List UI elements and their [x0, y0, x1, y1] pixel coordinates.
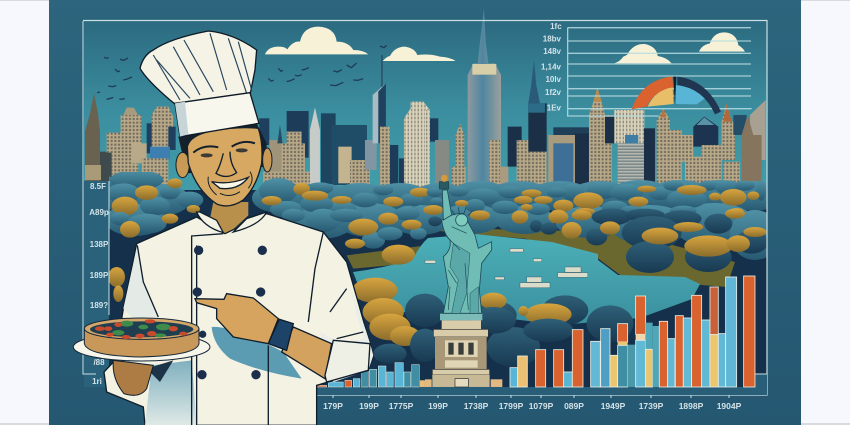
left axis labels: 189? — [90, 301, 108, 310]
clouds — [265, 27, 745, 63]
forearm and pointing hand — [195, 294, 370, 382]
left axis labels: 8.5F — [90, 182, 106, 191]
bar chart — [317, 363, 425, 387]
left hand under plate — [113, 360, 153, 395]
frame border lines — [83, 20, 767, 395]
skyline right — [425, 8, 766, 188]
x axis ticks and labels — [323, 395, 742, 411]
park ground — [109, 190, 767, 387]
x axis ticks and labels: 199P — [428, 401, 448, 411]
chef hat — [140, 31, 259, 137]
x axis ticks and labels: 1898P — [679, 401, 704, 411]
chart: horizontal grid with value labels: 1,14v — [541, 62, 562, 71]
bottom strip under bars — [316, 387, 767, 395]
buttons — [193, 246, 267, 379]
face — [187, 128, 262, 206]
gauge chart — [632, 76, 721, 114]
chef figure — [73, 31, 373, 425]
x axis ticks and labels: 089P — [564, 401, 584, 411]
filler tree canopy — [99, 180, 780, 260]
statue figure — [439, 175, 492, 313]
dish on plate — [73, 318, 210, 361]
sky — [84, 21, 767, 221]
x axis ticks and labels: 1949P — [601, 401, 626, 411]
x axis ticks and labels: 1079P — [529, 401, 554, 411]
icon: Statue of Liberty — [432, 175, 492, 387]
boats on lake — [360, 211, 588, 288]
panel: illustrated scene — [75, 8, 780, 387]
x axis ticks and labels: 1799P — [499, 401, 524, 411]
x axis ticks and labels: 199P — [359, 401, 379, 411]
hair and ears — [176, 123, 272, 178]
birds — [97, 45, 387, 99]
chart: horizontal grid with value labels: 148v — [543, 47, 562, 56]
x axis ticks and labels: 1738P — [464, 401, 489, 411]
lake — [353, 234, 700, 325]
chart: horizontal grid with value labels: 18bv — [543, 34, 562, 43]
left axis labels: /88 — [93, 358, 105, 367]
chart: horizontal grid with value labels: 1f2v — [545, 88, 562, 97]
x axis ticks and labels: 179P — [323, 401, 343, 411]
chart: horizontal grid with value labels: 10lv — [545, 75, 562, 84]
neck — [210, 202, 248, 235]
left axis labels: 189P — [90, 271, 109, 280]
x axis ticks and labels: 1739P — [639, 401, 664, 411]
pedestal — [432, 314, 490, 387]
olive ground around lake — [347, 227, 735, 287]
chart: horizontal grid with value labels: 1Ev — [547, 104, 562, 113]
chart: horizontal grid with value labels — [541, 22, 752, 116]
x axis ticks and labels: 1904P — [717, 401, 742, 411]
left axis labels: A89p — [89, 208, 109, 217]
chef jacket — [104, 212, 373, 425]
line to right of bars — [755, 373, 767, 375]
left axis labels: 1ri — [92, 377, 102, 386]
x axis ticks and labels: 1775P — [389, 401, 414, 411]
chart: horizontal grid with value labels: 1fc — [550, 22, 562, 31]
trees — [75, 170, 780, 367]
left axis labels — [89, 182, 109, 386]
left axis labels: 138P — [90, 240, 109, 249]
left axis panel — [83, 21, 109, 387]
skyline left — [85, 55, 430, 188]
